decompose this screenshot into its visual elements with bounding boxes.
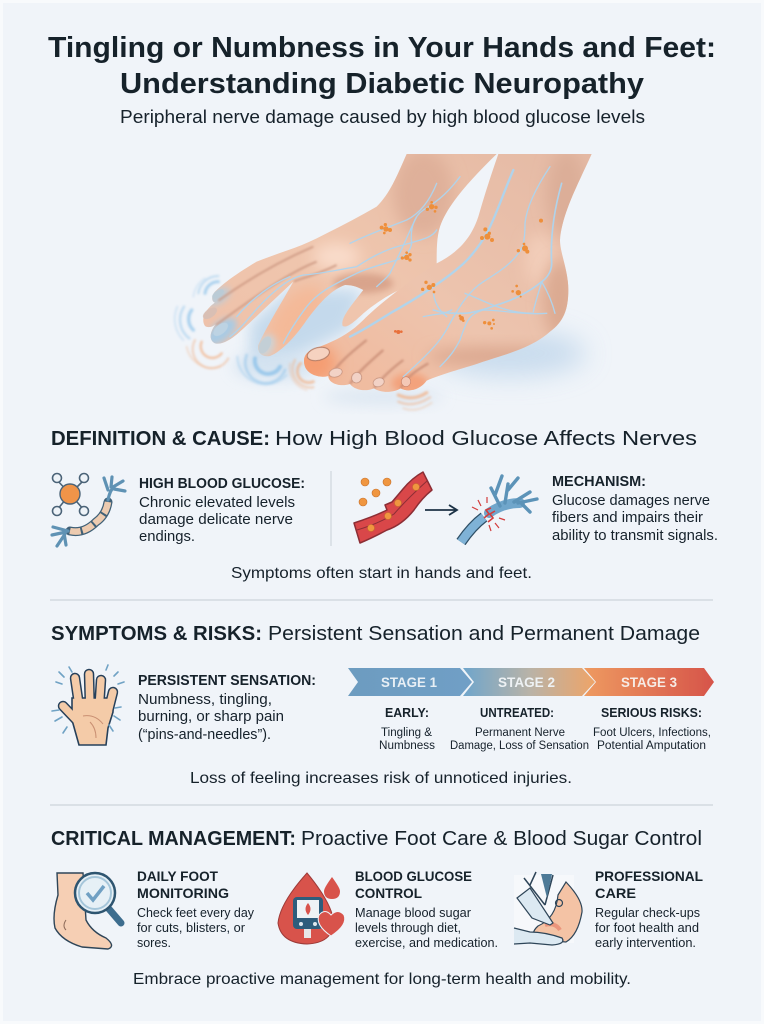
icon: glucose damaging blood vessel [354,472,432,543]
icon: hand [202,154,496,356]
icon: foot with magnifying glass [54,873,121,949]
callout: symptoms start: Symptoms often start in hands and feet. [231,565,532,582]
heading: definition and cause: How High Blood Glucose Affects Nerves [275,428,697,450]
heading: critical management: CRITICAL MANAGEMENT: [51,828,296,850]
icon: doctor examining foot [514,872,582,945]
stage 2 text: UNTREATED: [480,705,554,720]
text: blood glucose control: BLOOD GLUCOSE [355,868,472,884]
panel: symptoms and risks [51,623,714,787]
stage 3 text: Foot Ulcers, Infections, [593,727,711,739]
stage 3 text: SERIOUS RISKS: [601,705,702,720]
panel: critical management [51,828,703,988]
text: mechanism: MECHANISM: [552,474,646,490]
text: professional care: Regular check-ups [595,906,700,920]
subtitle: Peripheral nerve damage caused by high blood glucose levels [120,107,645,127]
callout: embrace proactive management: Embrace proactive management for long-term health and mobility. [133,971,631,988]
text: mechanism: fibers and impairs their [552,510,703,526]
chevron: stage 1: STAGE 1 [381,674,437,690]
arrow [425,505,457,515]
text: professional care: CARE [595,885,636,901]
text: persistent sensation: (“pins-and-needles”). [138,727,271,743]
text: daily foot monitoring: sores. [137,936,171,950]
stage 1 text [379,705,435,752]
title: Understanding Diabetic Neuropathy [120,68,644,100]
text: mechanism: Glucose damages nerve [552,493,710,509]
stage 1 text: Tingling & [381,727,432,739]
text: high blood glucose: damage delicate nerve [139,512,293,528]
text: persistent sensation [138,673,316,743]
text: blood glucose control: CONTROL [355,885,422,901]
stage 2 text: Damage, Loss of Sensation [450,740,589,752]
text: persistent sensation: Numbness, tingling, [138,692,272,708]
text: persistent sensation: PERSISTENT SENSATION: [138,673,316,689]
stage 1 text: Numbness [379,740,435,752]
text: high blood glucose: endings. [139,529,195,545]
panel: definition and cause [51,428,718,582]
text: daily foot monitoring: for cuts, blisters, or [137,921,245,935]
icon: glucose molecule and neuron [52,474,125,546]
text: professional care [595,868,703,950]
text: mechanism [552,474,718,544]
stage 2 text: Permanent Nerve [475,727,565,739]
orange glucose particles [380,201,543,334]
text: daily foot monitoring [137,868,255,950]
text: blood glucose control: Manage blood sugar [355,906,471,920]
title [48,32,716,100]
stage 3 text [593,705,711,752]
text: blood glucose control: exercise, and medication. [355,936,498,950]
stage 1 text: EARLY: [385,705,429,720]
text: daily foot monitoring: MONITORING [137,885,229,901]
text: daily foot monitoring: DAILY FOOT [137,868,218,884]
stage 3 text: Potential Amputation [597,740,706,752]
heading: critical management [51,828,702,850]
text: high blood glucose: Chronic elevated levels [139,495,295,511]
text: high blood glucose: HIGH BLOOD GLUCOSE: [139,476,305,492]
text: high blood glucose [139,476,305,545]
icon: blood drop, glucose meter and heart [278,873,345,944]
ripples: sensation waves at fingertips and toes [175,276,432,410]
icon: tingling hand [52,665,124,745]
title: Tingling or Numbness in Your Hands and Feet: [48,32,716,64]
text: persistent sensation: burning, or sharp pain [138,709,284,725]
callout: loss of feeling: Loss of feeling increases risk of unnoticed injuries. [190,770,572,787]
text: blood glucose control: levels through diet, [355,921,461,935]
chevron: stage 2 [463,668,595,696]
illustration: hand and foot with damaged nerves [175,150,600,410]
heading: definition and cause [51,428,697,450]
nerves [230,167,562,377]
chevron: stage 3 [584,668,714,696]
heading: symptoms and risks: Persistent Sensation and Permanent Damage [268,623,700,645]
shadows under hand and foot [233,287,587,405]
heading: critical management: Proactive Foot Care & Blood Sugar Control [301,828,702,850]
heading: definition and cause: DEFINITION & CAUSE: [51,428,270,450]
text: blood glucose control [355,868,498,950]
chevron: stage 3: STAGE 3 [621,674,677,690]
icon: foot [304,154,592,392]
text: daily foot monitoring: Check feet every day [137,906,255,920]
heading: symptoms and risks [51,623,700,645]
text: professional care: early intervention. [595,936,696,950]
chevron: stage 1 [348,668,472,696]
stage 2 text [450,705,589,752]
heading: symptoms and risks: SYMPTOMS & RISKS: [51,623,262,645]
text: professional care: PROFESSIONAL [595,868,703,884]
text: professional care: for foot health and [595,921,699,935]
text: mechanism: ability to transmit signals. [552,528,718,544]
chevron: stage 2: STAGE 2 [498,674,555,690]
icon: damaged nerve [461,476,537,542]
